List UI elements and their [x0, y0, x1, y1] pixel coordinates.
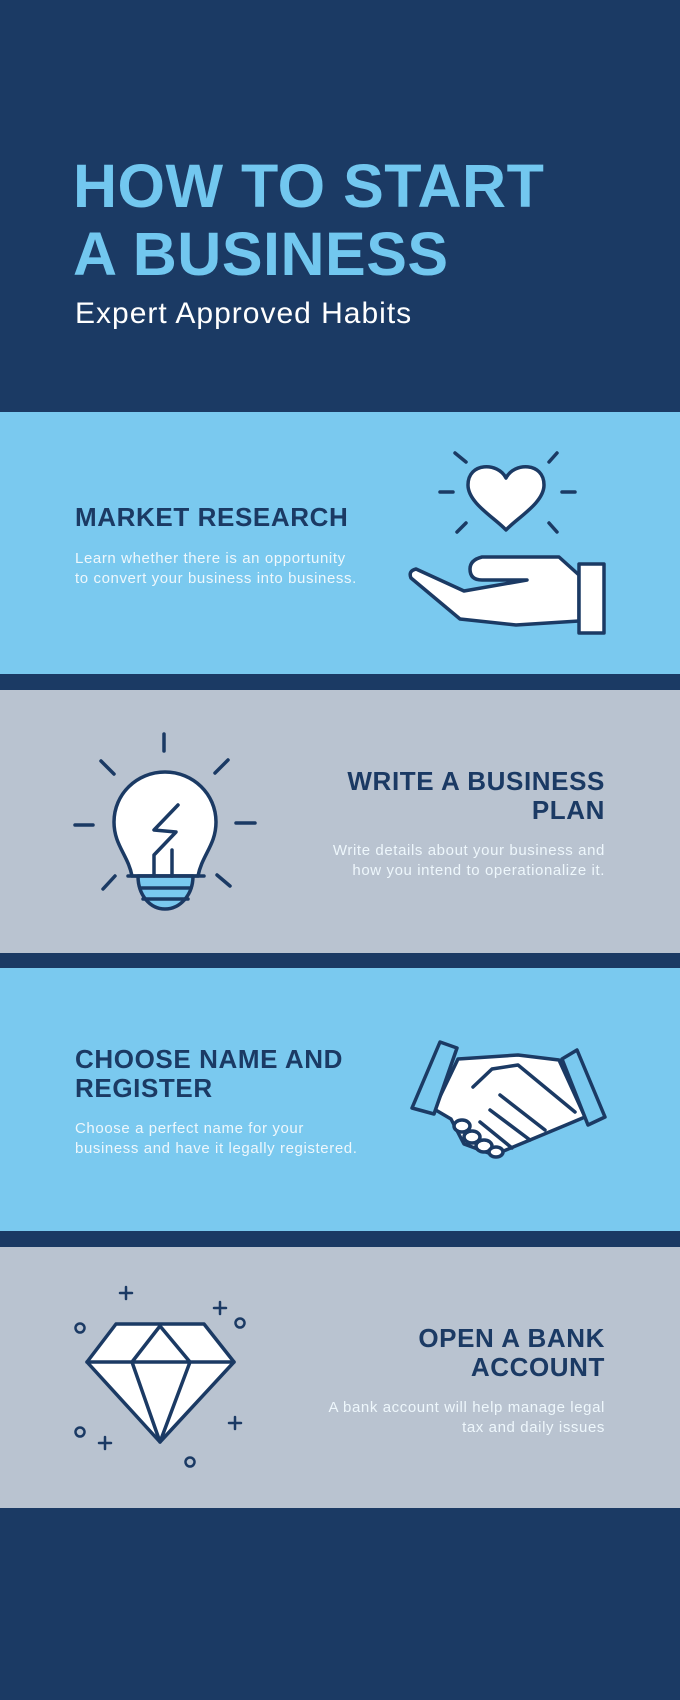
text: bank account: [328, 1399, 605, 1436]
text: business plan: Write details about your business and: [333, 842, 605, 859]
text: bank account: tax and daily issues: [462, 1418, 605, 1436]
text: market research: Learn whether there is an opportunity: [75, 550, 346, 567]
title: HOW TO START: [73, 152, 544, 220]
text: market research: [75, 550, 357, 586]
subtitle: Expert Approved Habits: [75, 297, 412, 330]
title: [73, 152, 544, 288]
heading: bank account: OPEN A BANK: [418, 1323, 605, 1353]
heading: name and register: CHOOSE NAME AND: [75, 1044, 343, 1074]
text: bank account: A bank account will help manage legal: [328, 1399, 605, 1416]
heading: bank account: [418, 1323, 605, 1382]
panel: business plan: [0, 690, 680, 953]
icon: diamond: [76, 1287, 244, 1466]
title: A BUSINESS: [73, 220, 449, 288]
icon: handshake: [412, 1042, 605, 1157]
heading: business plan: PLAN: [532, 795, 605, 825]
text: name and register: Choose a perfect name for your: [75, 1120, 304, 1137]
icon: heart in hand: [410, 453, 604, 633]
heading: business plan: WRITE A BUSINESS: [347, 766, 605, 796]
panel: bank account: [0, 1247, 680, 1508]
text: business plan: how you intend to operationalize it.: [352, 862, 605, 878]
text: market research: to convert your business into business.: [75, 570, 357, 586]
text: name and register: business and have it legally registered.: [75, 1140, 358, 1156]
heading: bank account: ACCOUNT: [471, 1352, 605, 1382]
panel: market research: [0, 412, 680, 674]
heading: name and register: REGISTER: [75, 1073, 213, 1103]
heading: market research: MARKET RESEARCH: [75, 502, 348, 532]
icon: lightbulb: [75, 734, 255, 909]
text: business plan: [333, 842, 605, 878]
panel: name and register: [0, 968, 680, 1231]
text: name and register: [75, 1120, 358, 1156]
heading: name and register: [75, 1044, 343, 1103]
heading: business plan: [347, 766, 605, 825]
